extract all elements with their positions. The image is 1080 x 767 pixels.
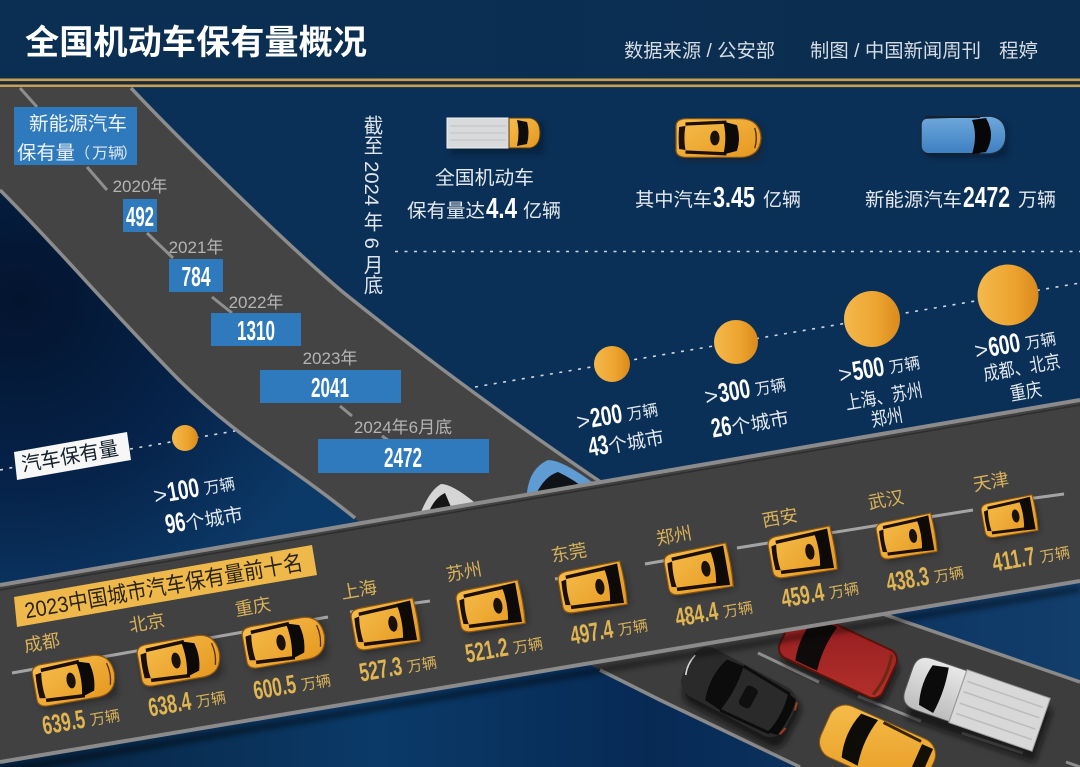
city: 天津: 天津	[971, 469, 1010, 495]
bubble: over 2 million	[574, 346, 666, 462]
bubble: over 6 million	[972, 264, 1062, 406]
bar: 2023: 2023年	[303, 349, 357, 368]
bubble: over 5 million	[836, 291, 924, 432]
city: 东莞	[549, 540, 650, 651]
city: 北京	[127, 610, 228, 723]
bar: 2024: 2472	[384, 442, 422, 473]
city: 重庆: 万辆	[300, 672, 332, 694]
bubble: over 1 million: >	[152, 481, 169, 509]
car ownership label: 汽车保有量	[20, 437, 120, 476]
stat: new energy vehicles: 万辆	[1018, 189, 1056, 211]
city: 西安: 459.4	[779, 576, 827, 614]
bubble: over 1 million: 96	[163, 507, 188, 540]
header bar	[0, 0, 1080, 87]
stat: cars: 亿辆	[763, 189, 801, 211]
bubble: over 5 million: 上海、苏州	[844, 379, 924, 415]
bar: 2022: 1310	[237, 315, 275, 346]
city: 东莞: 东莞	[549, 540, 588, 566]
city: 成都: 639.5	[40, 704, 87, 741]
stat: all motor vehicles	[407, 118, 561, 225]
city: 天津: 万辆	[1039, 544, 1071, 566]
new energy legend box: 新能源汽车	[29, 113, 127, 135]
bubble: over 3 million: >	[703, 382, 720, 410]
new energy legend box: （	[75, 145, 90, 162]
bar: 2021: 784	[182, 261, 211, 292]
bubble: over 5 million: 500	[850, 351, 887, 386]
bubble: over 1 million	[151, 425, 245, 540]
city: 西安: 万辆	[828, 580, 860, 602]
city: 东莞: 497.4	[568, 613, 616, 651]
credits: 数据来源 / 公安部	[624, 40, 775, 62]
title: 全国机动车保有量概况	[25, 24, 367, 62]
city: 上海	[339, 577, 439, 688]
city: 北京: 北京	[127, 610, 166, 636]
bubble: over 2 million: 200	[588, 398, 625, 433]
credits: 制图 / 中国新闻周刊	[810, 40, 981, 62]
stat: cars: 其中汽车	[635, 189, 712, 211]
city: 重庆	[233, 594, 333, 706]
bubble: over 2 million: >	[575, 407, 592, 435]
city: 苏州	[444, 559, 545, 669]
stat: all motor vehicles: 保有量达	[407, 200, 485, 222]
bar: 2022	[211, 293, 301, 346]
bubble: over 2 million: 个城市	[607, 427, 666, 458]
city: 苏州: 521.2	[463, 632, 510, 669]
bubble: over 6 million: 600	[986, 327, 1023, 362]
bubble: over 3 million: 个城市	[730, 407, 791, 439]
icon: partly hidden blue car on road	[527, 460, 592, 502]
city: 西安: 西安	[760, 505, 799, 531]
city: 重庆: 重庆	[233, 594, 272, 620]
stat: cars: 3.45	[713, 182, 755, 214]
city: 西安	[760, 505, 861, 614]
vertical date note: 截至 2024 年 6 月底	[360, 115, 383, 295]
city: 苏州: 苏州	[444, 559, 483, 585]
bubble: over 3 million: 300	[716, 373, 753, 408]
bubble: over 5 million: 郑州	[869, 404, 905, 432]
bar: 2023	[260, 349, 401, 403]
bubble: over 1 million: 个城市	[184, 503, 245, 535]
stat: all motor vehicles: 全国机动车	[435, 167, 534, 189]
bar: 2024: 2024年6月底	[354, 418, 452, 437]
icon: yellow car	[676, 119, 762, 161]
stat: new energy vehicles	[865, 116, 1056, 214]
city: 北京: 638.4	[146, 685, 194, 723]
city: 苏州: 万辆	[512, 635, 544, 657]
bubble: over 5 million: 万辆	[888, 354, 921, 377]
bubble: over 2 million: 万辆	[626, 401, 659, 424]
bar: 2022: 2022年	[229, 293, 283, 312]
bubble: over 1 million: 100	[165, 472, 202, 507]
city: 武汉: 万辆	[933, 564, 965, 586]
bar: 2023: 2041	[311, 372, 349, 403]
city: 郑州: 万辆	[722, 599, 754, 621]
stat: new energy vehicles: 新能源汽车	[865, 189, 962, 211]
city: 郑州: 484.4	[673, 595, 721, 633]
new energy legend box	[14, 107, 137, 165]
bubble: over 1 million: 万辆	[203, 475, 236, 498]
city: 武汉: 武汉	[866, 487, 905, 513]
panel: top ten cities road band	[0, 400, 1080, 763]
diagonal road: new energy vehicles	[0, 88, 620, 545]
bubble: over 6 million: >	[973, 336, 990, 364]
city: 成都	[22, 630, 122, 741]
lower road continuation	[590, 612, 1080, 767]
credits	[624, 40, 1038, 62]
icon: white pickup truck on lower road	[896, 653, 1056, 763]
bar: 2024	[318, 418, 489, 473]
city: 郑州	[654, 523, 755, 633]
bubble: over 6 million: 重庆	[1008, 378, 1044, 406]
city: 天津: 411.7	[990, 541, 1037, 578]
bubble: over 6 million: 成都、北京	[982, 350, 1062, 386]
city: 上海: 上海	[339, 577, 378, 603]
stat: cars	[635, 119, 801, 214]
bar: 2021: 2021年	[169, 238, 223, 257]
city: 上海: 527.3	[357, 651, 404, 688]
city: 武汉	[866, 487, 966, 598]
city: 郑州: 郑州	[654, 523, 693, 549]
bar: 2021	[169, 238, 223, 292]
bar: 2020: 492	[126, 201, 154, 232]
stat: all motor vehicles: 4.4	[486, 193, 517, 225]
bubble: over 3 million: 26	[709, 411, 734, 444]
icon: truck	[447, 118, 544, 154]
new energy legend box: 万辆	[92, 145, 124, 162]
city: 东莞: 万辆	[617, 617, 649, 639]
icon: red car on lower road	[773, 606, 905, 709]
city: 成都: 成都	[22, 630, 61, 656]
city: 北京: 万辆	[195, 689, 227, 711]
bubble: over 5 million: >	[837, 360, 854, 388]
band heading label: 2023中国城市汽车保有量前十名	[23, 550, 305, 623]
icon: partly hidden white car on road	[421, 484, 474, 514]
bubble: over 6 million: 万辆	[1024, 330, 1057, 353]
divider dotted lines	[395, 250, 1080, 252]
city: 上海: 万辆	[406, 654, 438, 676]
bubble: over 3 million: 万辆	[754, 376, 787, 399]
icon: black car on lower road	[672, 641, 808, 752]
new energy legend box: 保有量	[17, 142, 75, 164]
city: 武汉: 438.3	[884, 561, 931, 598]
stat: new energy vehicles: 2472	[963, 182, 1010, 214]
icon: yellow car on lower road	[814, 700, 941, 767]
icon: blue car	[921, 116, 1008, 158]
city: 成都: 万辆	[89, 707, 121, 729]
new energy legend box: ）	[122, 145, 137, 162]
city: 重庆: 600.5	[251, 669, 298, 706]
city: 天津	[971, 469, 1072, 578]
band shadow	[0, 586, 1080, 767]
bubble: over 2 million: 43	[586, 429, 611, 462]
bubble: over 3 million	[702, 320, 791, 444]
credits: 程婷	[999, 40, 1038, 62]
stat: all motor vehicles: 亿辆	[523, 200, 561, 222]
bar: 2020	[113, 177, 167, 232]
bar: 2020: 2020年	[113, 177, 167, 196]
